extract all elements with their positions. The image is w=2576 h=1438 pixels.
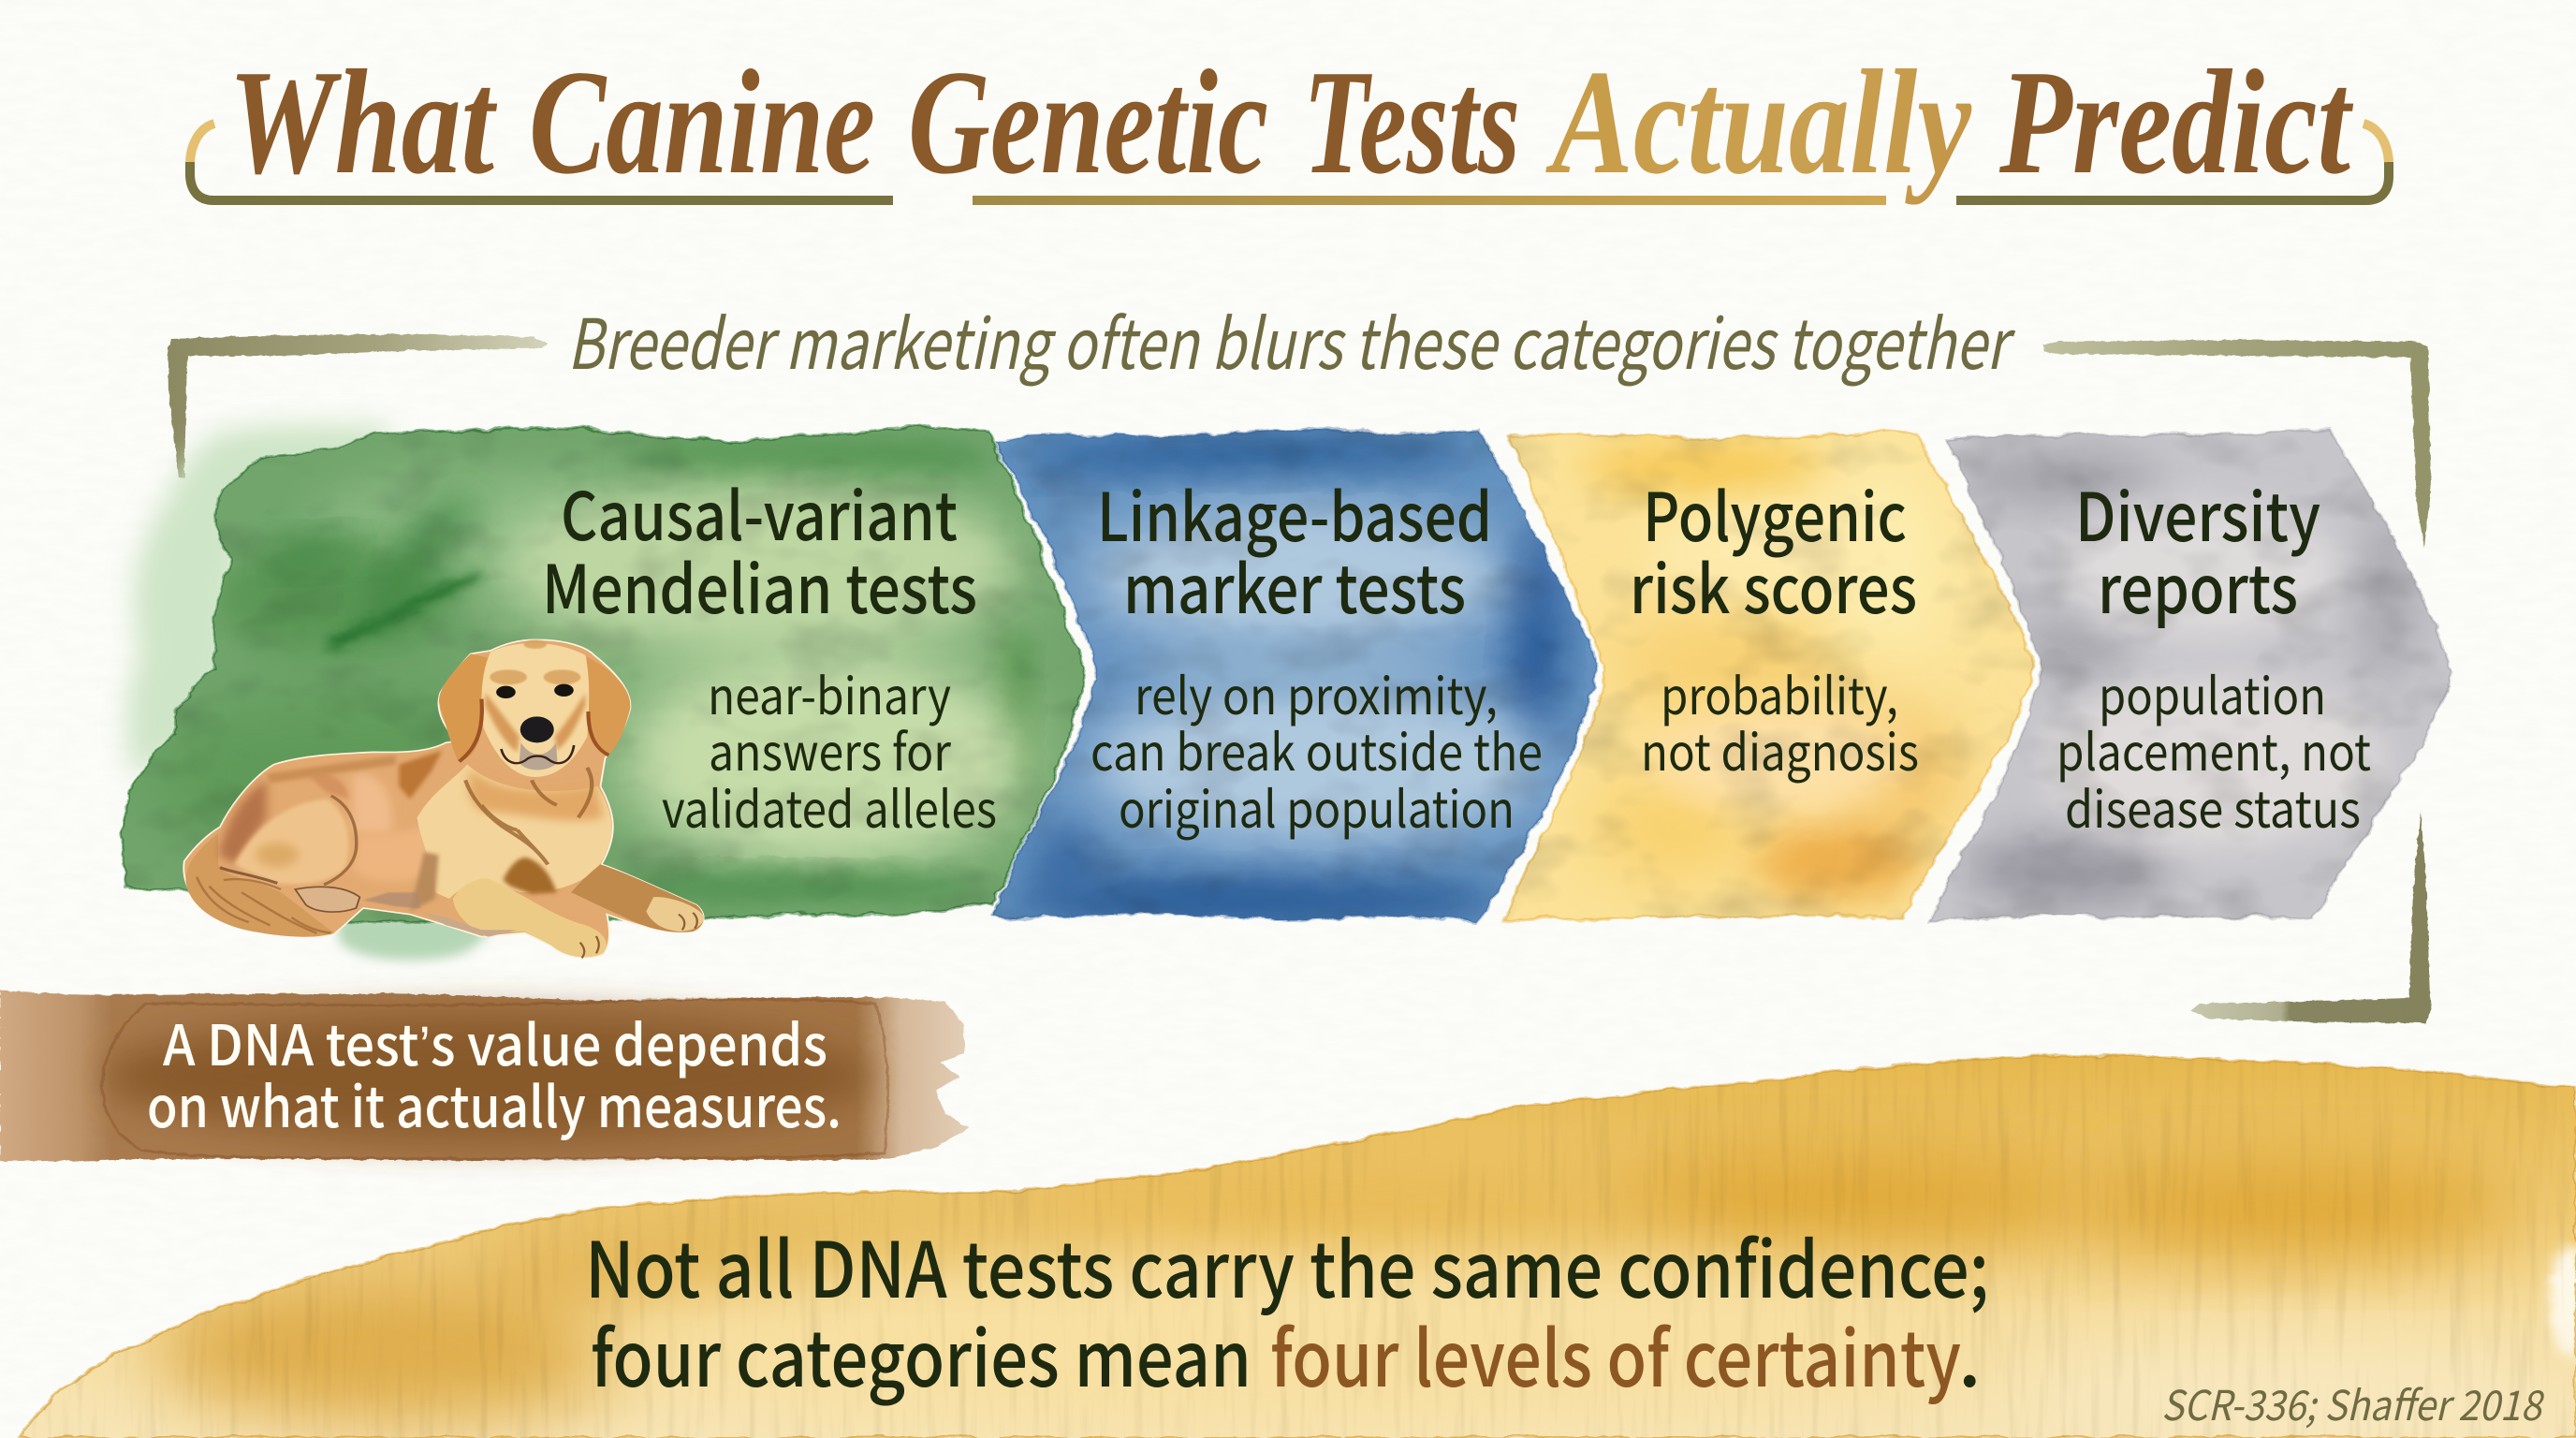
callout brown wash [0,990,969,1161]
bracket: top right brush stroke [2042,340,2431,548]
dog chest shading [410,768,604,911]
heading: causal-variant: Mendelian tests [542,537,977,633]
heading: polygenic: Polygenic [1643,465,1907,561]
panel: linkage-based marker tests [990,426,1599,925]
description: linkage-based [1090,655,1543,843]
heading: linkage-based: Linkage-based [1097,465,1492,561]
description: polygenic [1641,655,1919,785]
heading: linkage-based: marker tests [1123,537,1466,633]
panel text: polygenic [1630,465,1919,785]
dog ear dark tips [460,699,608,761]
heading: polygenic [1630,465,1917,633]
conclusion text: four levels of certainty [1270,1298,1961,1409]
heading: linkage-based [1097,465,1492,633]
dog haunch line [220,796,357,885]
description: causal-variant: near-binary [708,655,951,729]
description: polygenic: not diagnosis [1641,712,1919,785]
dog face shading [485,693,585,752]
title: Canine [529,38,875,205]
band: conclusion watercolor [0,1049,2576,1438]
heading: diversity: reports [2098,537,2298,633]
dog body [183,639,704,958]
description: causal-variant: answers for [709,712,952,785]
description: polygenic: probability, [1661,655,1898,729]
dog right foreleg [571,864,704,932]
dog rear paw [295,887,359,912]
title [228,38,2354,205]
bracket: bottom right brush stroke [2189,812,2431,1023]
callout: DNA test value [0,990,969,1161]
description: linkage-based: original population [1119,769,1515,843]
dog lower belly edge [424,913,518,937]
green watercolor shape [119,423,1086,925]
description: causal-variant: validated alleles [662,769,997,843]
callout text [147,1001,842,1144]
heading: causal-variant [542,464,977,633]
dog front leg [453,878,607,957]
panel: polygenic risk scores [1501,429,2036,924]
green outer wash [127,425,490,961]
bracket: top left brush stroke [168,334,548,477]
dog ear right [587,657,630,756]
dog muzzle shading [520,742,558,770]
callout inner edge [102,999,888,1159]
panel text: linkage-based [1090,465,1543,843]
panel: diversity reports [1926,427,2452,924]
illustration: golden retriever [183,639,704,958]
dog tail [186,833,335,937]
dog face [481,643,589,777]
title: Predict [1998,38,2354,205]
title: Genetic [908,38,1268,205]
panel text: causal-variant [542,464,997,843]
dog paw lines [580,913,697,958]
subtitle: Breeder marketing often blurs these categories together [567,289,2015,389]
panel text: diversity [2056,465,2371,843]
title: What [228,38,498,205]
heading: causal-variant: Causal-variant [561,464,958,560]
dog mouth [501,745,574,763]
description: causal-variant [662,655,997,843]
dog chest [417,765,611,899]
source citation: SCR-336; Shaffer 2018 [2161,1372,2545,1432]
conclusion text [585,1209,1989,1409]
band underlay: conclusion edges [19,1105,2576,1438]
description: diversity: placement, not [2056,712,2371,785]
conclusion text: four categories mean [591,1298,1251,1409]
dog ear left [439,653,490,761]
dog coat shading [218,751,442,884]
heading: diversity [2075,465,2320,633]
dog eyes [496,684,574,698]
description: diversity: population [2099,655,2326,729]
description: linkage-based: can break outside the [1090,712,1543,785]
dog belly fur [363,892,420,908]
conclusion text: . [1958,1298,1981,1409]
callout dark core [103,1015,871,1138]
callout text: A DNA test’s value depends [163,1001,827,1082]
title: Tests [1303,38,1520,205]
dog tail strokes [197,877,331,933]
callout text: on what it actually measures. [147,1063,842,1144]
dog chest fur strokes [465,768,592,864]
title underline bracket [190,124,2389,200]
panel: causal-variant Mendelian tests [94,403,1123,964]
conclusion text: Not all DNA tests carry the same confidence; [585,1209,1989,1320]
description: linkage-based: rely on proximity, [1134,655,1498,729]
dog nose [520,716,554,742]
description: diversity [2056,655,2371,843]
heading: polygenic: risk scores [1630,537,1917,633]
dog right paw [646,897,704,932]
dog brows [490,640,580,684]
title: Actually [1545,38,1972,205]
description: diversity: disease status [2065,769,2361,843]
heading: diversity: Diversity [2075,465,2320,561]
